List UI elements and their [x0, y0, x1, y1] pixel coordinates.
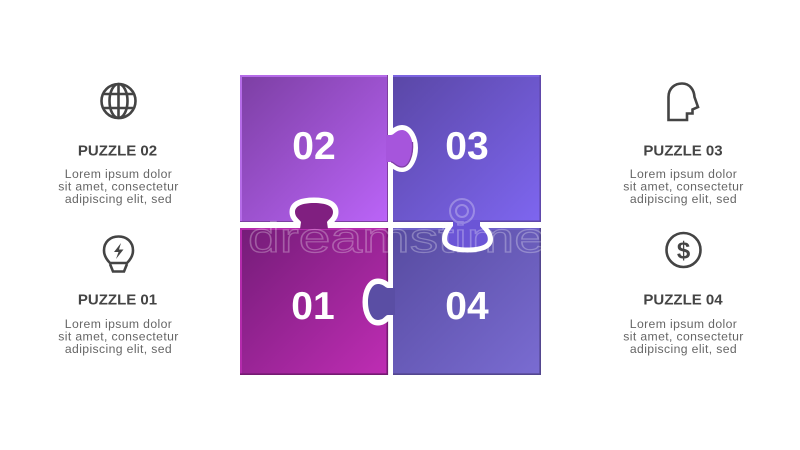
panel: puzzle 01 — [58, 236, 179, 356]
watermark — [248, 199, 546, 261]
piece 02 — [240, 75, 388, 222]
heading: puzzle 02: PUZZLE 02 — [78, 142, 157, 160]
tab: piece 04 into 01 — [368, 284, 395, 320]
tab: piece 01 into 02 — [295, 203, 333, 229]
heading: puzzle 04: PUZZLE 04 — [643, 292, 723, 308]
text: puzzle 03: Lorem ipsum dolor — [630, 167, 737, 181]
icon: light bulb — [104, 236, 133, 272]
tab: piece 02 into 03 — [386, 130, 413, 167]
tab: piece 03 into 04 — [447, 220, 488, 248]
number 01: 01 — [291, 285, 335, 328]
heading: puzzle 01: PUZZLE 01 — [78, 292, 157, 308]
text: puzzle 04: sit amet, consectetur — [623, 330, 744, 344]
icon: globe — [102, 84, 136, 118]
panel: puzzle 03 — [623, 84, 744, 206]
piece 01 — [240, 228, 388, 375]
panel: puzzle 04 — [623, 233, 744, 356]
piece 03 — [393, 75, 541, 222]
number 04: 04 — [445, 285, 489, 328]
text: puzzle 04: Lorem ipsum dolor — [630, 317, 737, 331]
piece 04 — [393, 228, 541, 375]
text: puzzle 02: adipiscing elit, sed — [65, 192, 172, 206]
text: puzzle 03: sit amet, consectetur — [623, 180, 744, 194]
heading: puzzle 03: PUZZLE 03 — [643, 142, 723, 160]
icon: head — [668, 84, 698, 120]
text: puzzle 01: sit amet, consectetur — [58, 330, 179, 344]
panel: puzzle 02 — [58, 84, 179, 206]
text: puzzle 01: adipiscing elit, sed — [65, 342, 172, 356]
text: puzzle 02: Lorem ipsum dolor — [65, 167, 172, 181]
text: puzzle 01: Lorem ipsum dolor — [65, 317, 172, 331]
icon: dollar coin: $ — [677, 238, 691, 264]
puzzle graphic — [240, 75, 541, 375]
number 02: 02 — [292, 125, 336, 168]
text: puzzle 04: adipiscing elit, sed — [630, 342, 737, 356]
watermark: dreamstime — [248, 214, 546, 261]
number 03: 03 — [445, 125, 489, 168]
text: puzzle 03: adipiscing elit, sed — [630, 192, 737, 206]
text: puzzle 02: sit amet, consectetur — [58, 180, 179, 194]
